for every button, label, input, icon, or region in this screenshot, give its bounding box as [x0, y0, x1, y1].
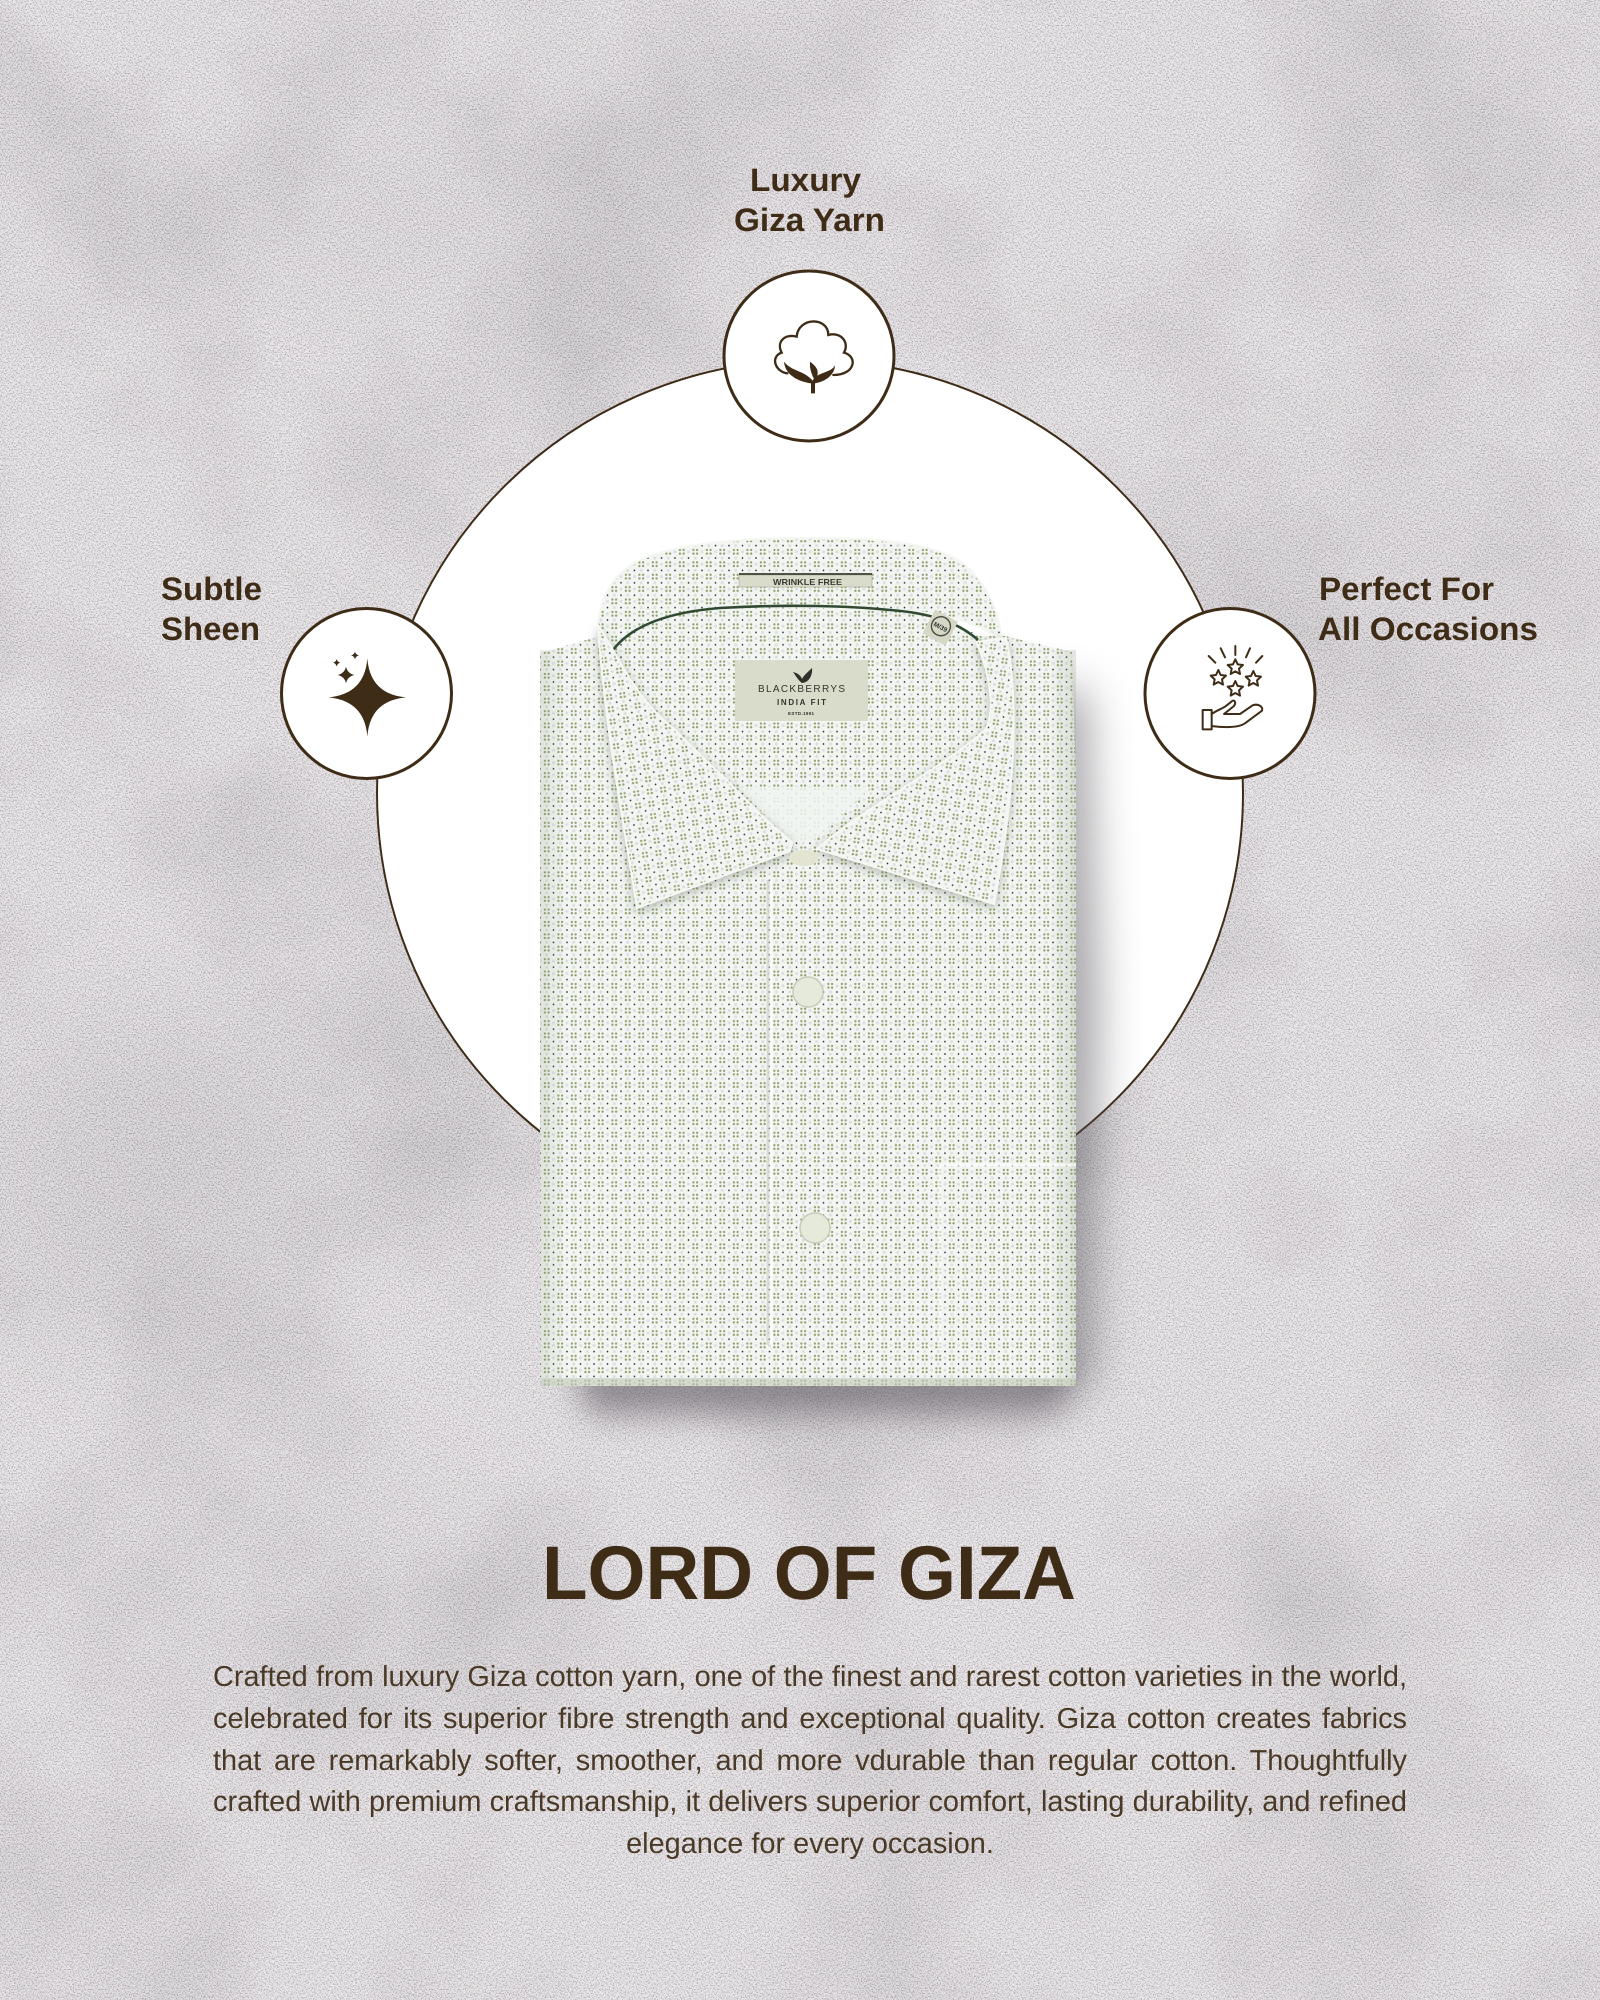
white yoke patch: [737, 787, 872, 840]
icon badge: Subtle Sheen (sparkle): [282, 608, 452, 778]
brand label: INDIA FIT: [777, 698, 826, 707]
body paragraph: crafted with premium craftsmanship, it delivers superior comfort, lasting durability, and refined: [213, 1786, 1407, 1818]
brand logo: [793, 668, 812, 683]
right collar leaf: [817, 638, 1014, 904]
body paragraph: celebrated for its superior fibre strength and exceptional quality. Giza cotton creates fabrics: [213, 1703, 1407, 1735]
shirt body: [540, 636, 1076, 1386]
body paragraph: Crafted from luxury Giza cotton yarn, one of the finest and rarest cotton varieties in the world,: [213, 1661, 1407, 1693]
placket and pocket seams: [768, 880, 1076, 1350]
labels and title: [161, 162, 1538, 1616]
label: Luxury Giza Yarn: Luxury: [750, 162, 861, 198]
placket buttons: [793, 977, 830, 1243]
label: Perfect For All Occasions: [1318, 571, 1538, 647]
icon: sparkle stars: [328, 652, 406, 737]
icon badge: Luxury Giza Yarn (cotton): [724, 271, 894, 441]
body paragraph: that are remarkably softer, smoother, and more vdurable than regular cotton. Thoughtfully: [213, 1745, 1407, 1777]
label: Subtle Sheen: Subtle: [161, 571, 262, 607]
label: Perfect For All Occasions: All Occasions: [1318, 611, 1538, 647]
left collar leaf: [598, 625, 792, 908]
bottom fold edge: [541, 1378, 1076, 1386]
size tag: M/39: [932, 621, 949, 634]
folded shirt: [540, 538, 1076, 1386]
brand label: [735, 660, 868, 721]
collar green piping: [613, 606, 978, 650]
back collar band: [597, 538, 1002, 650]
brand label: ESTD.1991: [788, 711, 814, 716]
large white circle behind shirt: [377, 360, 1243, 1226]
title: LORD OF GIZA: [542, 1531, 1076, 1616]
body paragraph: [213, 1661, 1407, 1860]
shirt shadow: [570, 690, 1098, 1414]
collar button: [789, 850, 819, 866]
size tag: [922, 610, 958, 646]
wrinkle free label: [739, 573, 872, 587]
label: Perfect For All Occasions: Perfect For: [1319, 571, 1494, 607]
brand label: BLACKBERRYS: [758, 684, 845, 695]
label: Subtle Sheen: [161, 571, 262, 647]
inner neck: [610, 606, 993, 845]
wrinkle free label: WRINKLE FREE: [773, 577, 842, 587]
label: Luxury Giza Yarn: Giza Yarn: [734, 202, 885, 238]
icon: hand holding stars: [1203, 646, 1262, 729]
icon: cotton boll: [775, 321, 853, 393]
body paragraph: elegance for every occasion.: [626, 1828, 994, 1860]
icon badge: Perfect For All Occasions (hand with stars): [1145, 608, 1315, 778]
label: Luxury Giza Yarn: [734, 162, 885, 238]
label: Subtle Sheen: Sheen: [161, 611, 260, 647]
